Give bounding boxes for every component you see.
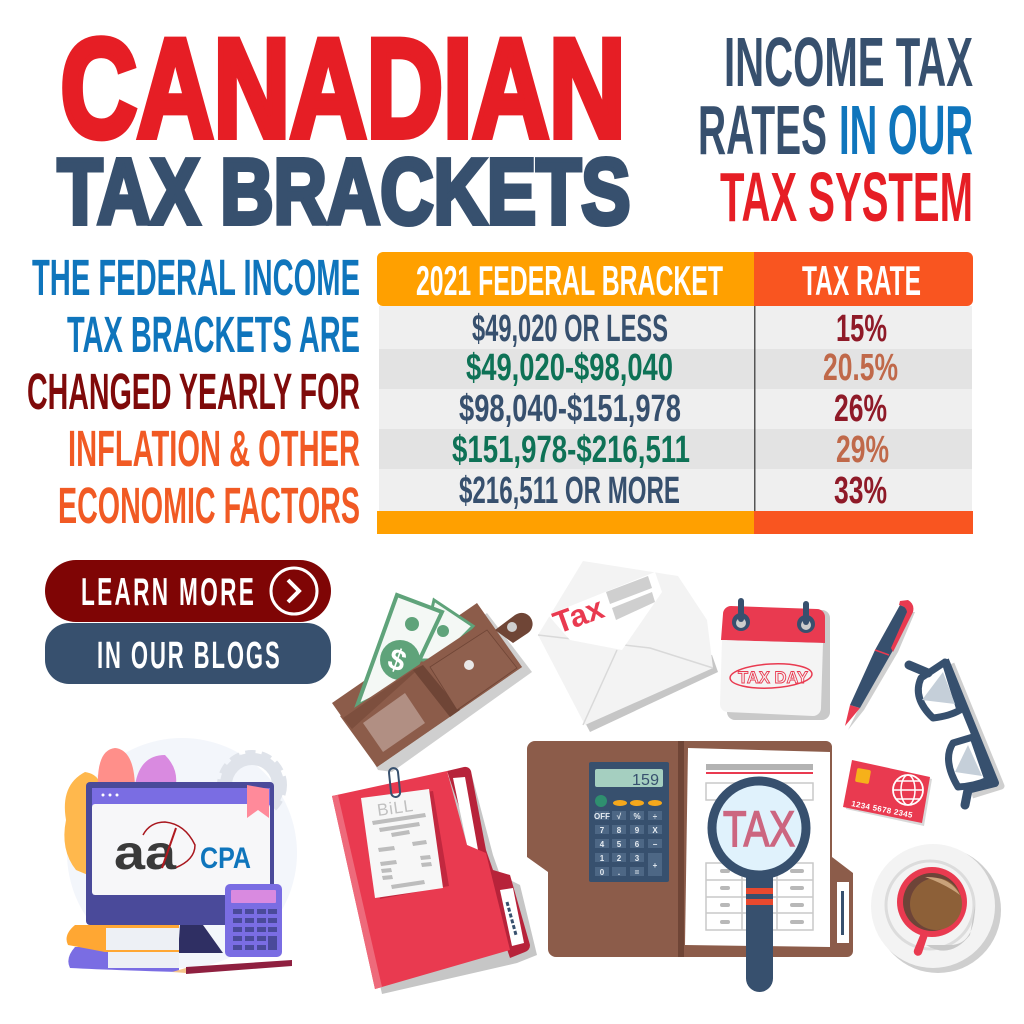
folder calculator: + bbox=[653, 861, 658, 870]
folder calculator: 9 bbox=[635, 826, 640, 835]
table: 2021 federal brackets and rates: $98,040-$151,978 bbox=[459, 388, 681, 430]
text block: federal brackets explanation: TAX BRACKETS ARE bbox=[67, 306, 360, 363]
title: Canadian Tax Brackets: CANADIAN bbox=[60, 10, 626, 166]
folder calculator: 8 bbox=[617, 826, 622, 835]
illustration: monitor with AA CPA logo, books and calculator: CPA bbox=[200, 842, 251, 875]
folder calculator: 3 bbox=[635, 854, 640, 863]
icon: tax day calendar bbox=[720, 598, 830, 720]
table: 2021 federal brackets and rates: $216,511 OR MORE bbox=[459, 470, 680, 512]
icon: pen bbox=[845, 600, 915, 730]
folder calculator: 1 bbox=[600, 854, 605, 863]
icon: credit card: 1234 5678 2345 bbox=[851, 799, 914, 820]
text block: federal brackets explanation: ECONOMIC FACTORS bbox=[58, 477, 360, 534]
table: 2021 federal brackets and rates: 15% bbox=[836, 308, 887, 350]
folder calculator: % bbox=[633, 812, 641, 821]
folder calculator: − bbox=[653, 840, 658, 849]
icon: coffee cup bbox=[871, 844, 1001, 973]
folder calculator: ÷ bbox=[653, 812, 658, 821]
folder calculator bbox=[589, 762, 669, 882]
folder calculator: OFF bbox=[594, 812, 610, 821]
table: 2021 federal brackets and rates: 29% bbox=[836, 429, 889, 471]
icon: tax day calendar: TAX DAY bbox=[738, 668, 809, 687]
folder calculator: 159 bbox=[632, 772, 659, 789]
button: learn more: LEARN MORE bbox=[81, 570, 254, 614]
magnifying glass: TAX bbox=[723, 801, 795, 857]
folder calculator: X bbox=[652, 826, 658, 835]
icon: red folder with bill: BiLL bbox=[376, 796, 414, 820]
illustration: monitor with AA CPA logo, books and calculator: aa bbox=[114, 827, 176, 880]
button: learn more bbox=[45, 560, 331, 622]
table: 2021 federal brackets and rates bbox=[377, 252, 973, 534]
table: 2021 federal brackets and rates: TAX RATE bbox=[802, 257, 921, 304]
text block: federal brackets explanation: CHANGED YEARLY FOR bbox=[27, 363, 360, 420]
folder calculator: 0 bbox=[600, 868, 605, 877]
icon: credit card bbox=[843, 760, 932, 826]
text block: federal brackets explanation bbox=[27, 249, 360, 534]
table: 2021 federal brackets and rates: 20.5% bbox=[823, 347, 898, 389]
folder calculator: 4 bbox=[600, 840, 605, 849]
icon: red folder with bill bbox=[332, 767, 537, 994]
text block: federal brackets explanation: THE FEDERAL INCOME bbox=[32, 249, 360, 306]
illustration: monitor with AA CPA logo, books and calculator bbox=[64, 738, 297, 974]
icon: wallet with cash: $ bbox=[384, 642, 411, 679]
table: 2021 federal brackets and rates: $49,020 OR LESS bbox=[472, 308, 668, 350]
title: Canadian Tax Brackets bbox=[58, 10, 630, 244]
icon: eyeglasses bbox=[909, 660, 1001, 805]
icon: tax envelope bbox=[538, 561, 718, 732]
folder calculator: . bbox=[618, 868, 620, 877]
magnifying glass bbox=[712, 781, 806, 992]
table: 2021 federal brackets and rates: 2021 FEDERAL BRACKET bbox=[416, 257, 723, 304]
button: in our blogs bbox=[45, 623, 331, 684]
title: Canadian Tax Brackets: TAX BRACKETS bbox=[58, 140, 630, 244]
table: 2021 federal brackets and rates: 26% bbox=[834, 388, 887, 430]
folder calculator: √ bbox=[617, 812, 622, 821]
button: in our blogs: IN OUR BLOGS bbox=[97, 634, 280, 677]
subtitle: income tax rates in our tax system: RATES bbox=[698, 91, 827, 169]
table: 2021 federal brackets and rates: $151,978-$216,511 bbox=[452, 429, 690, 471]
text block: federal brackets explanation: INFLATION & OTHER bbox=[68, 420, 360, 477]
folder calculator: = bbox=[635, 868, 640, 877]
folder calculator: 5 bbox=[617, 840, 622, 849]
subtitle: income tax rates in our tax system bbox=[698, 23, 973, 236]
folder calculator: 6 bbox=[635, 840, 640, 849]
folder calculator: 7 bbox=[600, 826, 605, 835]
folder calculator: 2 bbox=[617, 854, 622, 863]
icon: wallet with cash bbox=[332, 595, 533, 772]
icon: brown folder with tax documents bbox=[527, 741, 853, 992]
icon: tax envelope: Tax bbox=[548, 590, 609, 641]
table: 2021 federal brackets and rates: 33% bbox=[834, 470, 887, 512]
table: 2021 federal brackets and rates: $49,020-$98,040 bbox=[466, 347, 673, 389]
